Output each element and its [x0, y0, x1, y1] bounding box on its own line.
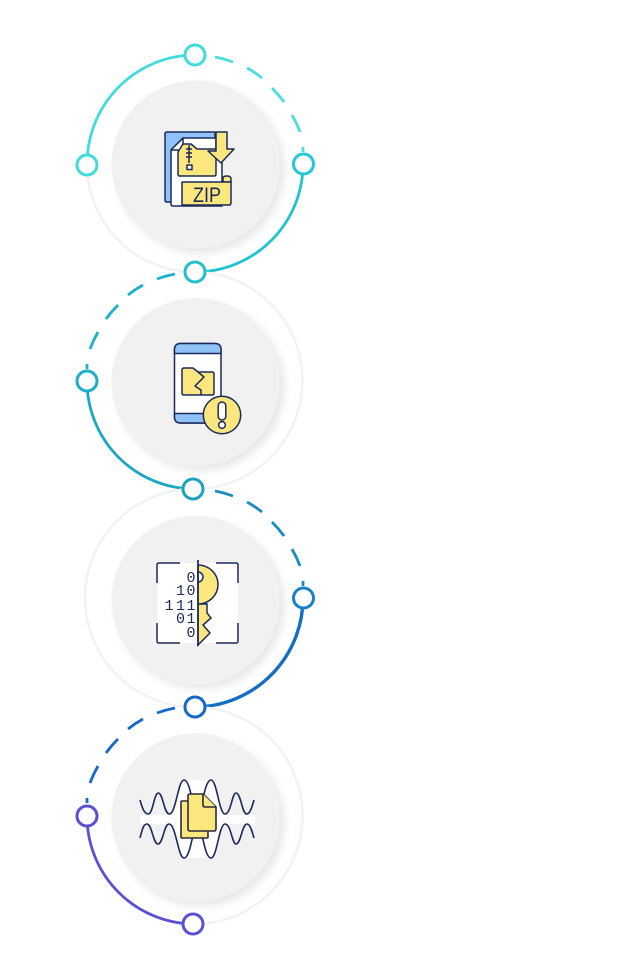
inner circle: step 1 — [112, 80, 280, 248]
icon: binary key — [157, 560, 238, 646]
binary digits: 111 — [164, 598, 196, 615]
icon: files on sound waves — [140, 780, 255, 858]
icon: phone with corrupted folder — [174, 344, 241, 434]
binary digits: 0 — [186, 625, 196, 642]
binary digits: 01 — [176, 611, 196, 628]
panel: step 4 ring — [87, 707, 303, 924]
binary digits — [164, 570, 196, 642]
binary digits: 10 — [176, 583, 196, 600]
panel: step 2 ring — [87, 272, 302, 489]
inner circle: step 2 — [112, 298, 280, 466]
icon: zip file — [165, 132, 234, 207]
inner circle: step 4 — [112, 734, 280, 902]
icon: zip file: ZIP — [193, 184, 221, 207]
inner circle: step 3 — [112, 516, 280, 684]
binary digits: 0 — [186, 570, 196, 587]
panel: step 1 ring — [87, 55, 303, 272]
node markers — [77, 45, 314, 934]
panel: step 3 ring — [85, 489, 303, 707]
